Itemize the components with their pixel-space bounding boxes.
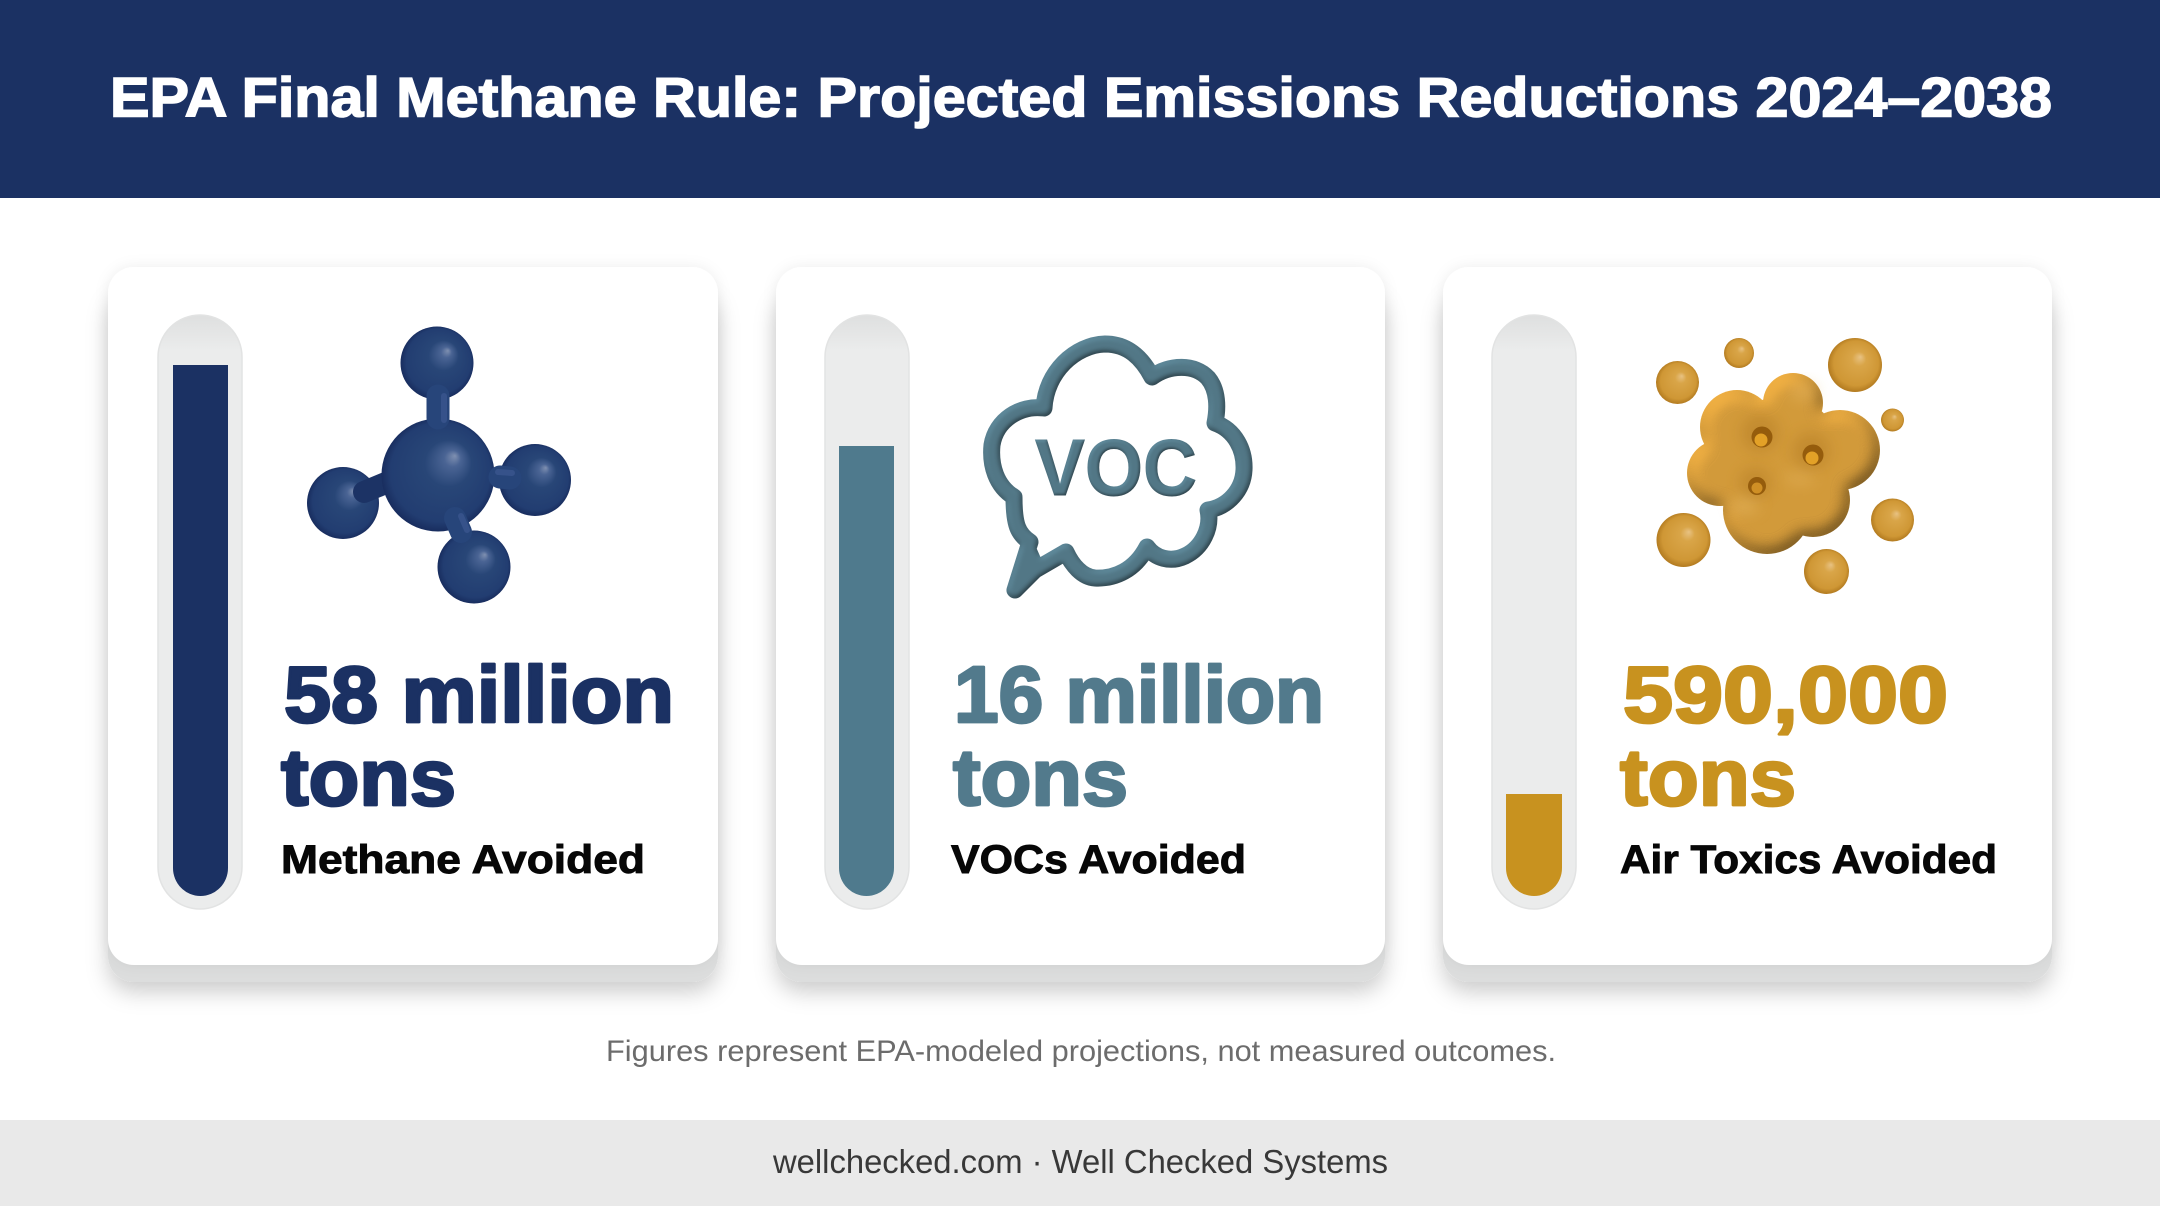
- title: EPA Final Methane Rule: Projected Emissions Reductions 2024–2038: [110, 66, 2052, 128]
- stat: 590,000 tons: 590,000: [1623, 650, 1948, 739]
- icon: toxic particle cluster: [1656, 338, 1914, 594]
- gauge: air toxics bar: [1492, 315, 1576, 909]
- panel: air toxics: [1443, 267, 2052, 982]
- stat: 58 million tons: 58 million: [284, 650, 674, 739]
- footnote: Figures represent EPA-modeled projections, not measured outcomes.: [606, 1035, 1556, 1068]
- stat: 58 million tons: [281, 650, 674, 822]
- stat: 590,000 tons: [1620, 650, 1948, 822]
- stat: 590,000 tons: tons: [1620, 733, 1796, 822]
- footer bar: [0, 1120, 2160, 1206]
- label: VOCs avoided: VOCs Avoided: [951, 838, 1246, 882]
- gauge: VOC bar: [825, 315, 909, 909]
- footer text: wellchecked.com · Well Checked Systems: [772, 1143, 1388, 1180]
- panel: methane: [108, 267, 718, 982]
- stat: 58 million tons: tons: [281, 733, 456, 822]
- icon: methane molecule: [307, 326, 571, 604]
- stat: 16 million tons: tons: [953, 733, 1128, 822]
- panel: VOCs: [776, 267, 1385, 982]
- label: air toxics avoided: Air Toxics Avoided: [1620, 838, 1997, 882]
- header banner: [0, 0, 2160, 198]
- gauge: methane bar: [158, 315, 242, 909]
- icon: VOC speech cloud: [992, 344, 1244, 590]
- icon: VOC speech cloud: VOC: [1035, 423, 1197, 512]
- stat: 16 million tons: 16 million: [954, 650, 1324, 739]
- stat: 16 million tons: [953, 650, 1324, 822]
- label: methane avoided: Methane Avoided: [281, 838, 645, 882]
